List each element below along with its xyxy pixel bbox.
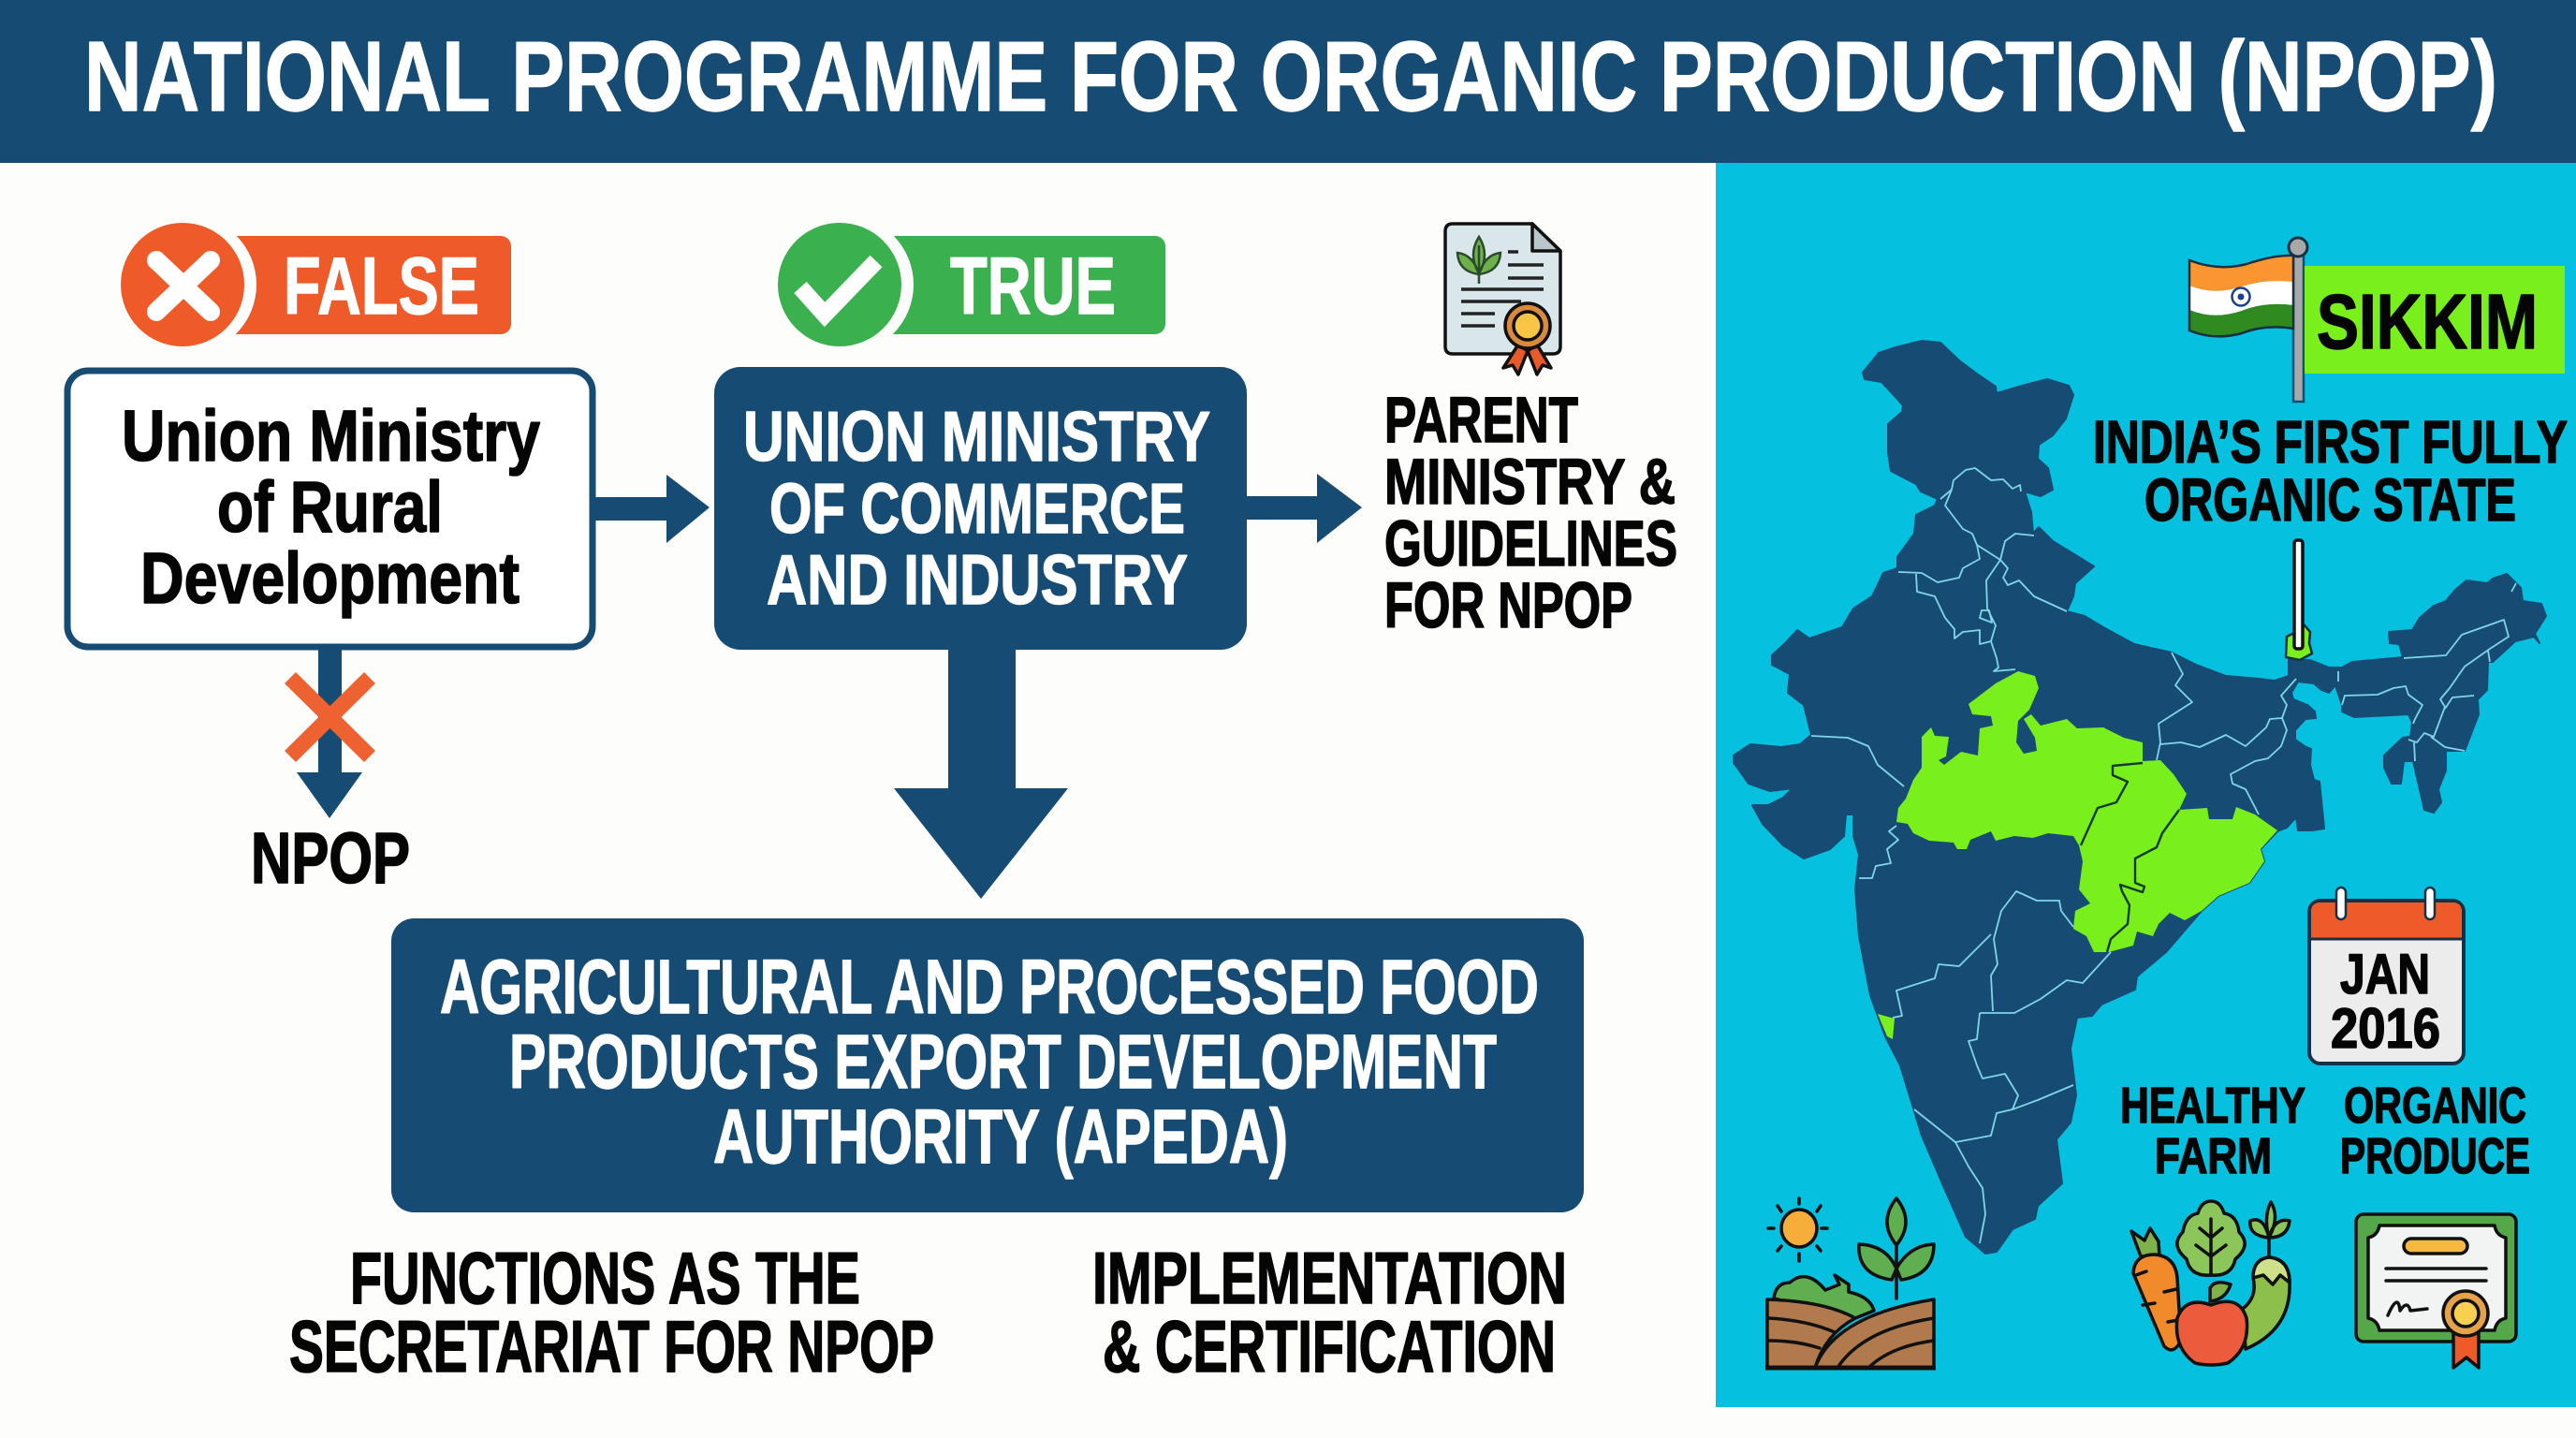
text: parent ministry and guidelines: FOR NPOP [1384,569,1632,641]
flag with pole [2189,238,2307,402]
text: healthy farm: HEALTHY [2120,1078,2305,1134]
text: functions as the secretariat [289,1237,934,1387]
icon: calendar Jan 2016: 2016 [2331,997,2440,1060]
icon: calendar Jan 2016: JAN [2340,943,2430,1005]
box: APEDA: PRODUCTS EXPORT DEVELOPMENT [509,1020,1497,1105]
text: functions as the secretariat: SECRETARIAT FOR NPOP [289,1305,934,1387]
map of India [1734,341,2546,1254]
title banner [0,0,2576,163]
badge: false: FALSE [284,242,479,331]
inner borders of highlighted states [2081,763,2179,952]
arrow: rural ministry to NPOP, crossed out [290,646,370,818]
box: Union Ministry of Rural Development: Union Ministry [122,396,540,477]
box: APEDA: AUTHORITY (APEDA) [713,1094,1288,1180]
box: Union Ministry of Commerce and Industry: OF COMMERCE [769,469,1185,548]
text: healthy farm: FARM [2155,1128,2272,1184]
text: organic produce [2340,1078,2530,1184]
panel: Sikkim map background [1716,163,2576,1407]
text: parent ministry and guidelines: MINISTRY & [1384,446,1676,518]
icon: guidelines document with seal [1445,224,1560,374]
box: Union Ministry of Commerce and Industry: AND INDUSTRY [767,540,1188,619]
label: NPOP: NPOP [251,818,410,899]
icon: healthy farm [1765,1198,1936,1368]
map outline [1734,341,2546,1254]
badge: false [118,215,511,354]
text: healthy farm [2120,1078,2305,1184]
arrow: commerce ministry down to APEDA [894,646,1068,899]
text: functions as the secretariat: FUNCTIONS AS THE [350,1237,860,1319]
text: parent ministry and guidelines: GUIDELINES [1384,507,1677,580]
box: Union Ministry of Rural Development [67,371,593,647]
pointer line to Sikkim [2294,540,2303,649]
box: APEDA: AGRICULTURAL AND PROCESSED FOOD [440,945,1539,1030]
icon: organic produce [2131,1201,2290,1365]
box: APEDA [391,918,1584,1212]
arrow: rural ministry to commerce ministry [593,475,710,543]
Sikkim highlight [2286,625,2312,660]
badge: true: TRUE [950,242,1116,331]
icon: organic certificate [2356,1214,2516,1368]
box: Union Ministry of Rural Development: Development [140,538,520,619]
icon: calendar Jan 2016 [2309,888,2464,1064]
text: India's first fully organic state [2093,408,2568,534]
Goa highlight [1878,1014,1895,1039]
text: parent ministry and guidelines: PARENT [1384,384,1578,456]
badge: true [775,215,1165,354]
text: organic produce: ORGANIC [2344,1078,2526,1134]
text: implementation and certification: IMPLEMENTATION [1092,1237,1567,1319]
highlighted states [1896,671,2277,952]
box: Union Ministry of Commerce and Industry [714,367,1247,650]
text: parent ministry and guidelines [1384,384,1677,641]
arrow: commerce ministry to guidelines [1245,474,1362,543]
text: implementation and certification: & CERTIFICATION [1103,1305,1556,1387]
box: Union Ministry of Commerce and Industry: UNION MINISTRY [743,397,1210,476]
text: implementation and certification [1092,1237,1567,1387]
state borders [1811,468,2516,1243]
box: Union Ministry of Rural Development: of Rural [217,467,443,548]
